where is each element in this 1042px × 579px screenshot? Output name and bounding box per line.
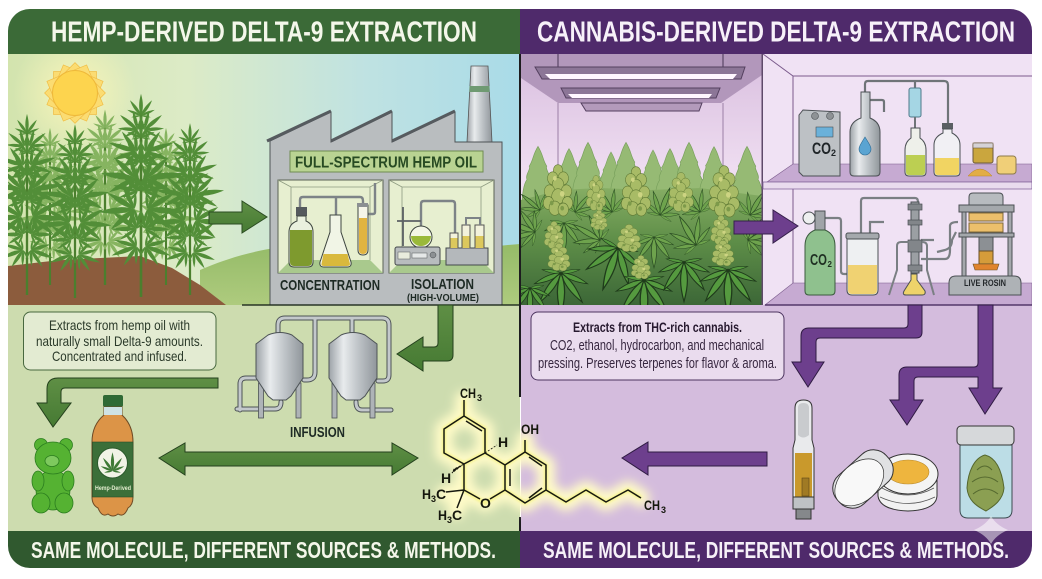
tank one [256,332,303,400]
callout: cannabis description [531,312,784,380]
arrow: vape to molecule [622,442,767,475]
tank legs [258,383,375,418]
condenser and flask [905,88,926,176]
callout: hemp description [24,312,216,370]
erlenmeyer flask [320,215,351,267]
icon: hemp beverage bottle: Hemp-Derived [95,485,131,492]
ground line [242,304,520,306]
fan leaves [499,181,784,268]
label: high-volume: (HIGH-VOLUME) [407,292,479,304]
live rosin press [949,193,1021,295]
green CO2 cylinder: 2 [828,260,832,269]
shelf divider [763,182,1032,189]
molecule labels: OH [521,421,539,437]
lab base line [765,304,1032,306]
CO2 extraction machine [799,110,840,176]
buds [543,165,573,216]
bottom shelf tubing [825,198,958,274]
hemp scene: sky background [8,54,520,305]
bottom shelf floor [765,283,1032,305]
hot plate [395,247,440,265]
glass vessel [846,233,879,295]
icon: gummy bear [32,438,74,513]
shelf walls [763,54,1032,283]
distillation tubing [421,201,455,236]
molecule labels: C [436,486,446,502]
icon: sun [26,54,122,140]
molecule glow [444,400,641,510]
molecule labels: 3 [477,393,482,403]
panel: hemp-derived extraction [0,31,520,531]
callout: hemp description: naturally small Delta-9 amounts. [36,333,203,349]
hemp plants [0,94,228,298]
molecule labels: 3 [661,505,666,515]
arrow: lab to concentrate and flower [890,305,1002,425]
arrow: lab to vape cartridge [792,305,922,387]
molecule labels: H [441,470,451,486]
header band: hemp [8,9,520,54]
sign: full-spectrum hemp oil: FULL-SPECTRUM HEMP OIL [295,154,477,172]
CO2 extraction machine: 2 [831,148,836,158]
molecule labels: CH [644,497,660,513]
round flask [410,226,432,248]
arrow: factory to infusion [397,305,453,371]
molecule labels: H [498,434,508,450]
top shelf glass tubing [865,81,948,124]
room: concentration [278,180,383,273]
arrow: plant to lab [734,210,798,243]
green CO2 cylinder: CO [810,252,827,269]
ceiling [521,54,762,103]
olive bottle [289,207,313,267]
footer band: cannabis [520,531,1032,568]
double arrow: products to molecule [159,443,418,475]
arrow: field to factory [209,201,267,233]
center divider [519,54,521,531]
icon: flower jar [957,426,1014,518]
pipes [237,318,391,410]
stand pole [397,207,421,246]
CO2 extraction machine: CO [812,139,831,158]
bottle label [92,442,133,497]
callout: hemp description: Extracts from hemp oil with [49,317,190,333]
extraction lab shelves [763,54,1032,305]
icon: factory chimney [467,66,492,142]
divider: grow room [762,54,763,305]
extract jars [968,143,1016,176]
callout: cannabis description: pressing. Preserves terpenes for flavor & aroma. [538,356,777,372]
column still [889,202,934,295]
tube rack [446,218,488,265]
molecule labels: CH [460,385,476,401]
molecule labels: 3 [431,494,436,504]
icon: infusion tanks [237,318,391,418]
molecule bonds [444,400,641,508]
top shelf floor [767,164,1032,182]
header band: hemp: HEMP-DERIVED DELTA-9 EXTRACTION [51,16,477,48]
molecule labels: C [452,507,462,523]
watermark sparkle [974,516,1008,544]
icon: vape cartridge [793,400,814,519]
live rosin press: LIVE ROSIN [964,278,1006,289]
header band: cannabis [520,9,1032,54]
factory building [270,112,502,305]
hemp lower panel background [8,305,520,531]
molecule: delta-9 THC [422,385,666,525]
soil [8,256,226,305]
footer band: hemp: SAME MOLECULE, DIFFERENT SOURCES & METHODS. [31,537,496,563]
hills [200,244,520,305]
arrow: infusion to products [37,378,218,427]
molecule labels: H [422,486,431,502]
room: isolation [389,180,494,273]
icon: hemp beverage bottle [92,395,133,516]
grow lights [535,54,745,111]
foliage mass [521,188,762,305]
molecule labels: O [480,495,491,511]
panel: cannabis-derived extraction [499,54,1032,531]
cannabis lower panel background [521,305,1032,531]
label: infusion: INFUSION [290,425,345,441]
molecule stereo bonds [452,445,497,473]
label: isolation: ISOLATION [411,276,474,293]
tank two [329,332,377,400]
background colas [520,142,765,219]
callout: hemp description: Concentrated and infused. [52,348,187,364]
molecule halo [444,400,641,503]
green CO2 cylinder [803,211,835,295]
label: concentration: CONCENTRATION [280,277,380,294]
factory roof edge [267,111,455,141]
molecule labels: H [438,507,447,523]
molecule labels: 3 [447,515,452,525]
molecule labels [422,385,666,525]
test tube [357,203,368,255]
lab tubing [300,183,375,216]
callout: cannabis description: CO2, ethanol, hydrocarbon, and mechanical [550,338,764,354]
steel solvent tank [850,92,880,176]
room edges [558,103,723,180]
icon: concentrate jar [826,443,938,515]
footer band: hemp [8,531,520,568]
callout: cannabis description: Extracts from THC-rich cannabis. [573,319,742,335]
yellow collection bottle [934,123,960,176]
grow room [499,54,784,324]
